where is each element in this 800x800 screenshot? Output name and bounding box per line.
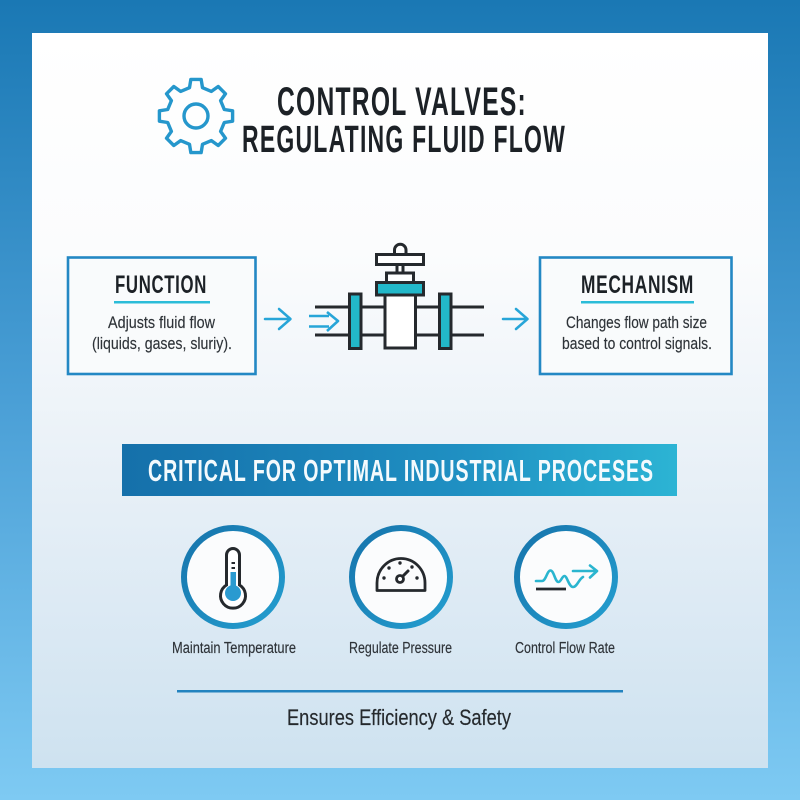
teal cap — [376, 282, 424, 295]
knob — [394, 244, 406, 254]
closing statement: Ensures Efficiency & Safety — [287, 705, 511, 730]
banner — [122, 444, 677, 496]
divider — [177, 690, 623, 692]
title: REGULATING FLUID FLOW — [242, 119, 566, 161]
stem — [397, 264, 403, 273]
title: CONTROL VALVES: — [277, 80, 527, 124]
icon: gauge — [352, 528, 450, 626]
handle — [376, 254, 424, 264]
text: function description — [92, 314, 232, 353]
left flange — [350, 294, 361, 348]
item: control flow rate — [515, 528, 615, 657]
panel: function — [68, 258, 256, 374]
right flange — [440, 294, 451, 348]
text: mechanism description: based to control signals. — [562, 335, 712, 353]
valve body — [385, 295, 416, 348]
icon: valve — [309, 244, 484, 348]
text: mechanism description: Changes flow path size — [566, 314, 707, 332]
panel: mechanism — [540, 258, 732, 374]
pipes — [315, 307, 484, 335]
item: maintain temperature — [172, 528, 296, 657]
arrow: function to valve — [265, 309, 290, 329]
text: function description: (liquids, gases, sluriy). — [92, 335, 232, 353]
heading: mechanism: MECHANISM — [581, 271, 694, 299]
underline: function — [114, 301, 210, 304]
label: Regulate Pressure — [349, 640, 452, 657]
title — [242, 80, 566, 161]
arrow: valve to mechanism — [503, 309, 528, 329]
icon: thermometer — [184, 528, 282, 626]
label: Control Flow Rate — [515, 640, 615, 657]
underline: mechanism — [581, 301, 694, 304]
item: regulate pressure — [349, 528, 452, 657]
text: mechanism description — [562, 314, 712, 353]
icon: gear — [159, 79, 233, 153]
heading: function: FUNCTION — [115, 271, 207, 299]
icon: flow wave — [517, 528, 615, 626]
flow arrow — [309, 312, 338, 331]
bonnet — [386, 273, 414, 282]
text: function description: Adjusts fluid flow — [108, 314, 215, 332]
label: Maintain Temperature — [172, 640, 296, 657]
